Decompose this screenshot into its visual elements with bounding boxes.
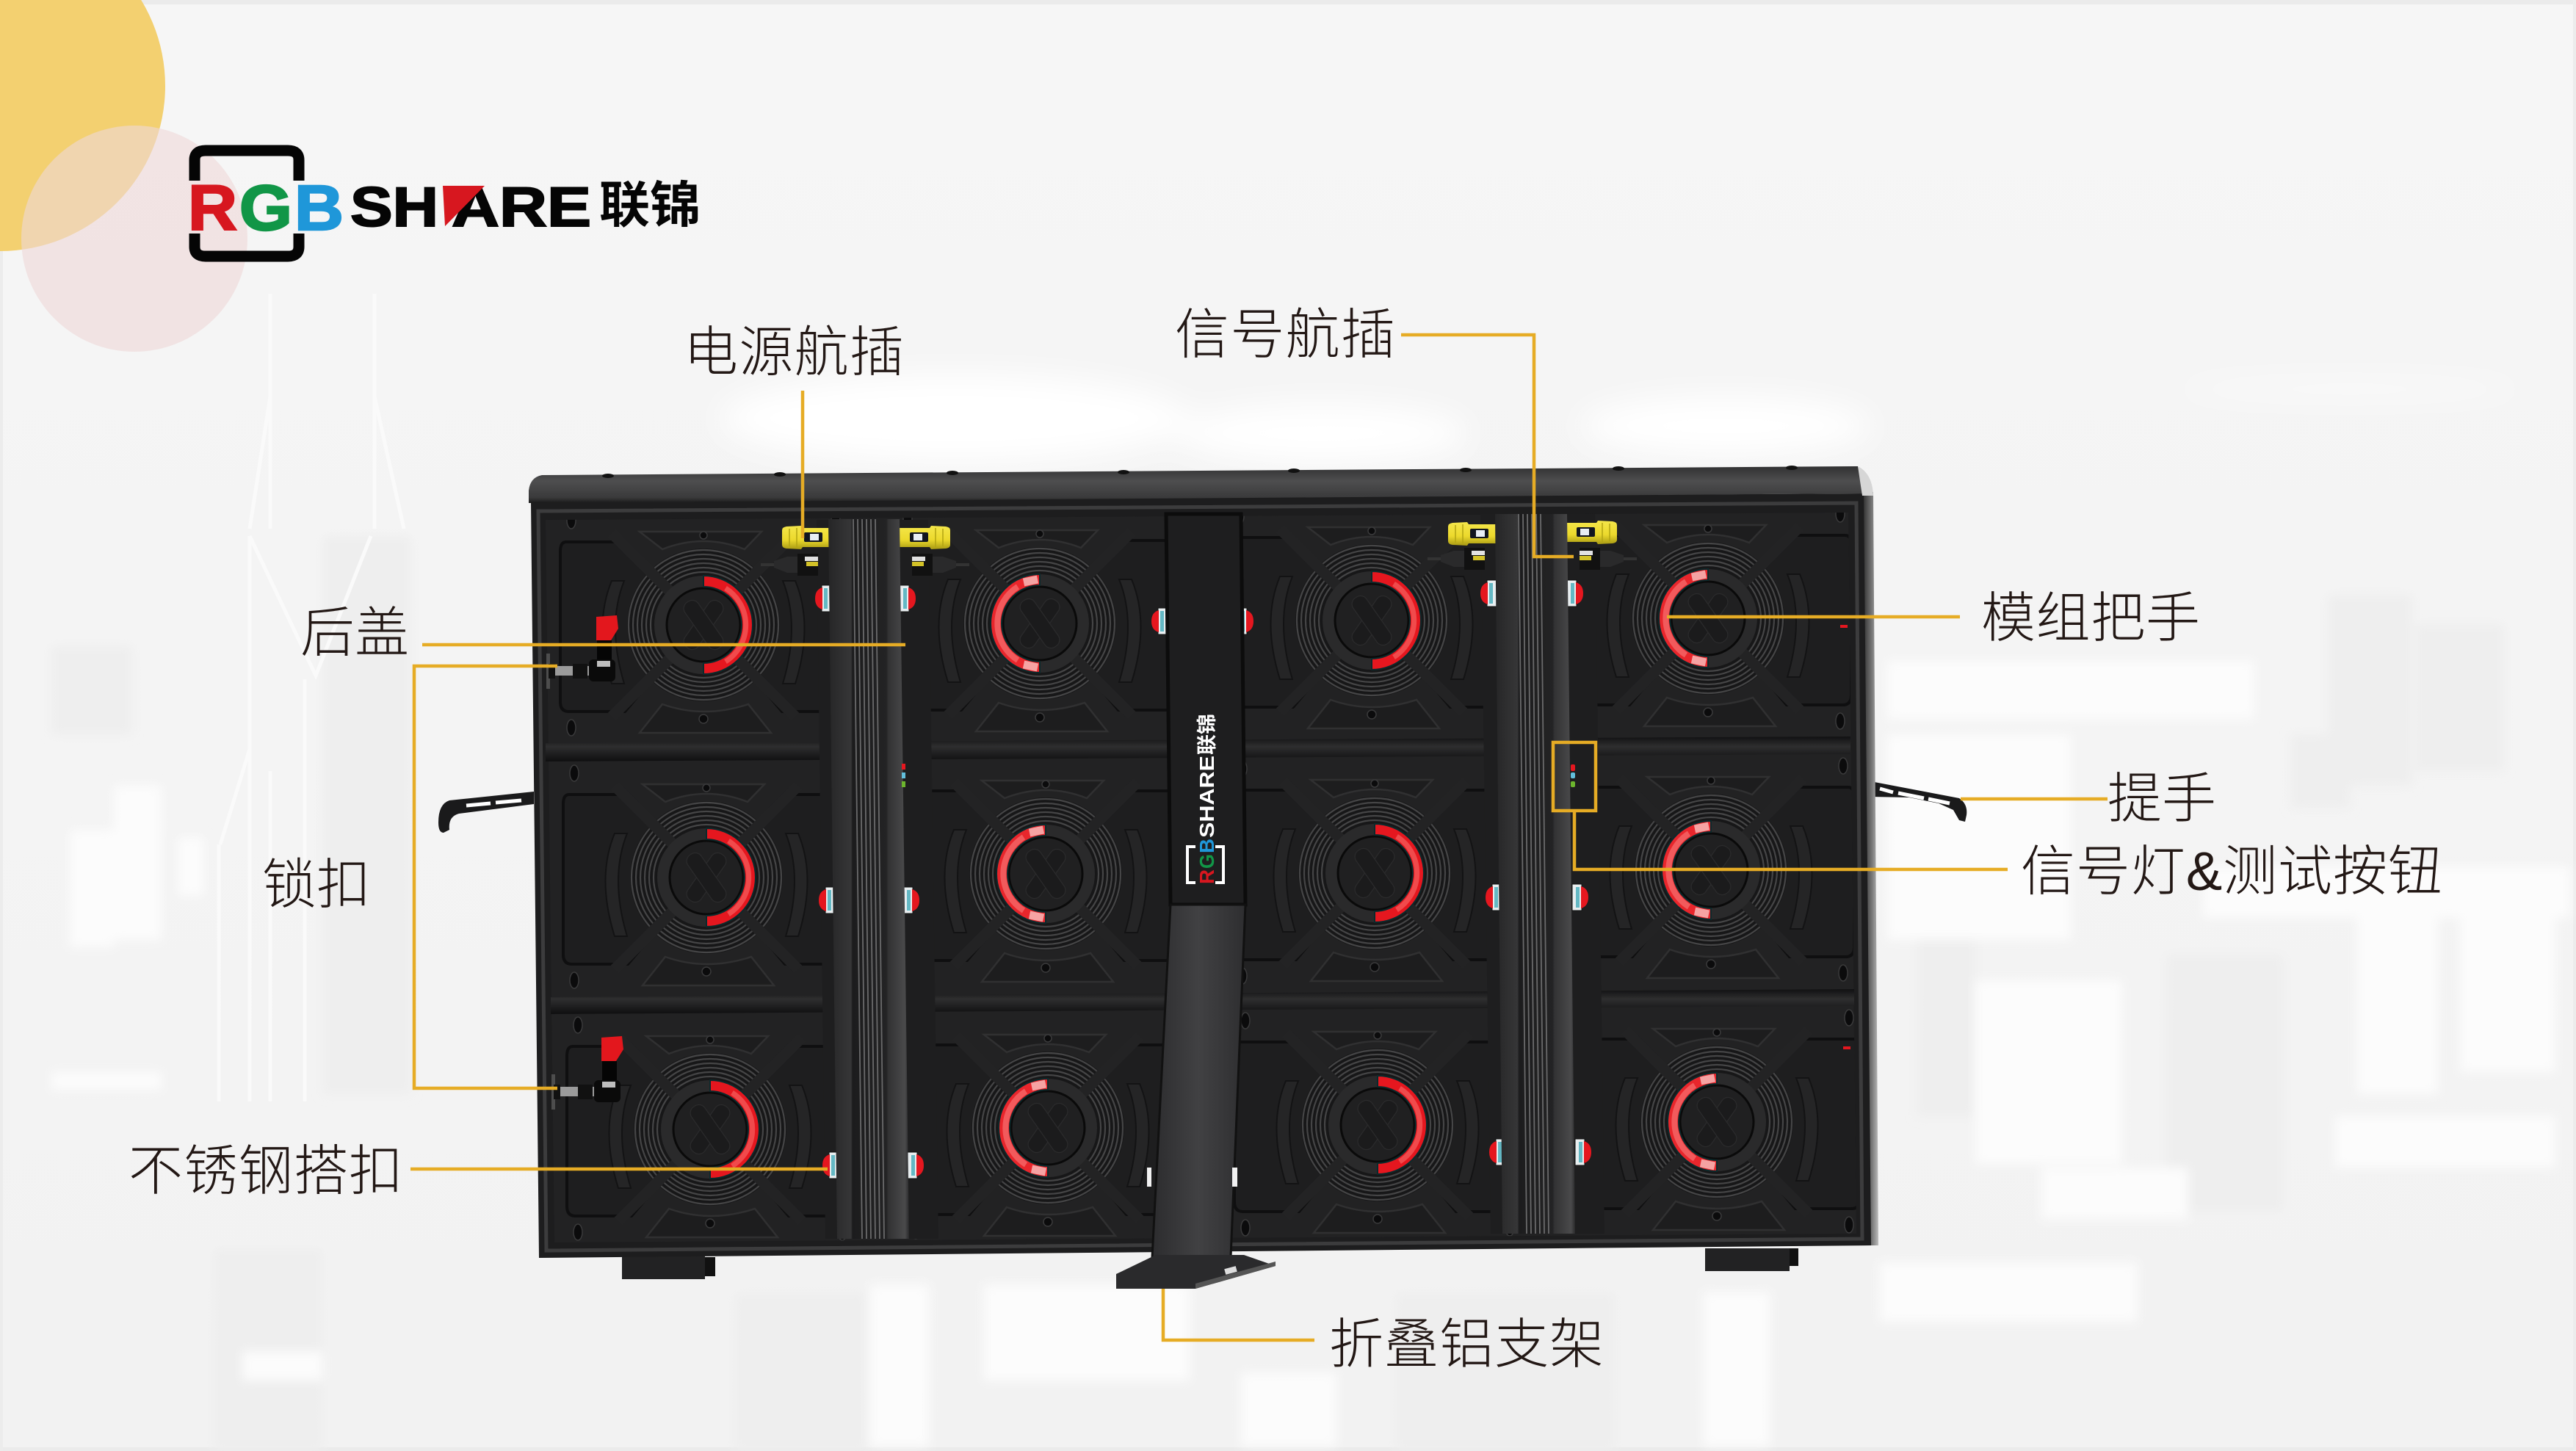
callout line: 信号航插 (1401, 335, 1574, 557)
stand logo: SHARE (1195, 756, 1218, 838)
callout box and line: 信号灯&测试按钮 (1553, 742, 2008, 869)
status LEDs (1571, 764, 1575, 787)
stand lower leg (1152, 905, 1245, 1257)
lock arms (546, 615, 623, 1110)
logo: RGBSHARE 联锦 (188, 151, 701, 256)
horizontal cross bars (546, 737, 1854, 1014)
logo RGB letters: G (239, 173, 292, 244)
label: 信号航插: 信号航插 (1175, 304, 1395, 365)
callout line: 后盖 (422, 643, 905, 646)
power connectors yellow (782, 521, 1617, 549)
callout line: 模组把手 (1667, 615, 1960, 618)
label: 折叠铝支架: 折叠铝支架 (1329, 1314, 1604, 1375)
LED cabinet rear view (438, 466, 1967, 1289)
back cover interior (546, 513, 1856, 1242)
label: 提手: 提手 (2108, 768, 2216, 829)
logo RGB letters (188, 173, 344, 244)
callout line: 电源航插 (801, 391, 804, 538)
stand clips (1147, 1168, 1237, 1187)
left foot (622, 1256, 715, 1279)
stand logo: 联锦 (1191, 714, 1220, 755)
right light edge (1862, 492, 1878, 1245)
stand logo: R (1195, 869, 1218, 884)
module row 2 (562, 757, 1853, 989)
small red marks near right frame (1840, 625, 1850, 1049)
logo RGB letters: R (188, 173, 237, 244)
left carry handle (438, 792, 534, 833)
stand upper column (1166, 514, 1245, 905)
top cap (529, 466, 1873, 503)
signal connectors black (761, 546, 1637, 577)
callout line: 折叠铝支架 (1163, 1289, 1314, 1340)
decorative yellow circle (0, 0, 165, 251)
callout line: 不锈钢搭扣 (410, 1168, 828, 1170)
label: 后盖: 后盖 (300, 602, 409, 663)
stand logo: G (1195, 854, 1218, 869)
logo SHARE letters: ARE (452, 176, 591, 239)
vertical rail left (828, 519, 909, 1239)
right foot (1705, 1248, 1798, 1271)
folding aluminium stand (1116, 514, 1276, 1289)
decorative pink circle (21, 126, 247, 352)
stand logo: B (1195, 839, 1218, 853)
label: 模组把手: 模组把手 (1981, 587, 2200, 648)
label: 信号灯&测试按钮: 信号灯&测试按钮 (2021, 841, 2442, 902)
logo bracket (195, 151, 299, 256)
label: 不锈钢搭扣: 不锈钢搭扣 (129, 1140, 403, 1201)
label: 电源航插: 电源航插 (684, 322, 904, 383)
rail-side LEDs (902, 764, 905, 787)
logo chinese name: 联锦 (599, 164, 701, 237)
stainless steel latches (815, 580, 1591, 1179)
module handles, red arcs (703, 569, 1717, 1179)
dark strips beside rails (817, 514, 1604, 1239)
logo RGB letters: B (294, 173, 344, 244)
module row 1 (559, 513, 1850, 737)
logo SHARE letters (350, 176, 591, 239)
callout line: 提手 (1961, 797, 2108, 800)
cabinet frame (531, 493, 1871, 1258)
module row 3 (565, 1009, 1856, 1241)
callout bracket: 锁扣 (414, 666, 557, 1088)
stand logo (1187, 714, 1223, 884)
logo SHARE letters: SH (350, 176, 438, 239)
stand base plate (1116, 1255, 1276, 1289)
vertical rail right (1495, 514, 1575, 1234)
label: 锁扣: 锁扣 (262, 854, 371, 915)
right carry handle (1867, 781, 1967, 822)
